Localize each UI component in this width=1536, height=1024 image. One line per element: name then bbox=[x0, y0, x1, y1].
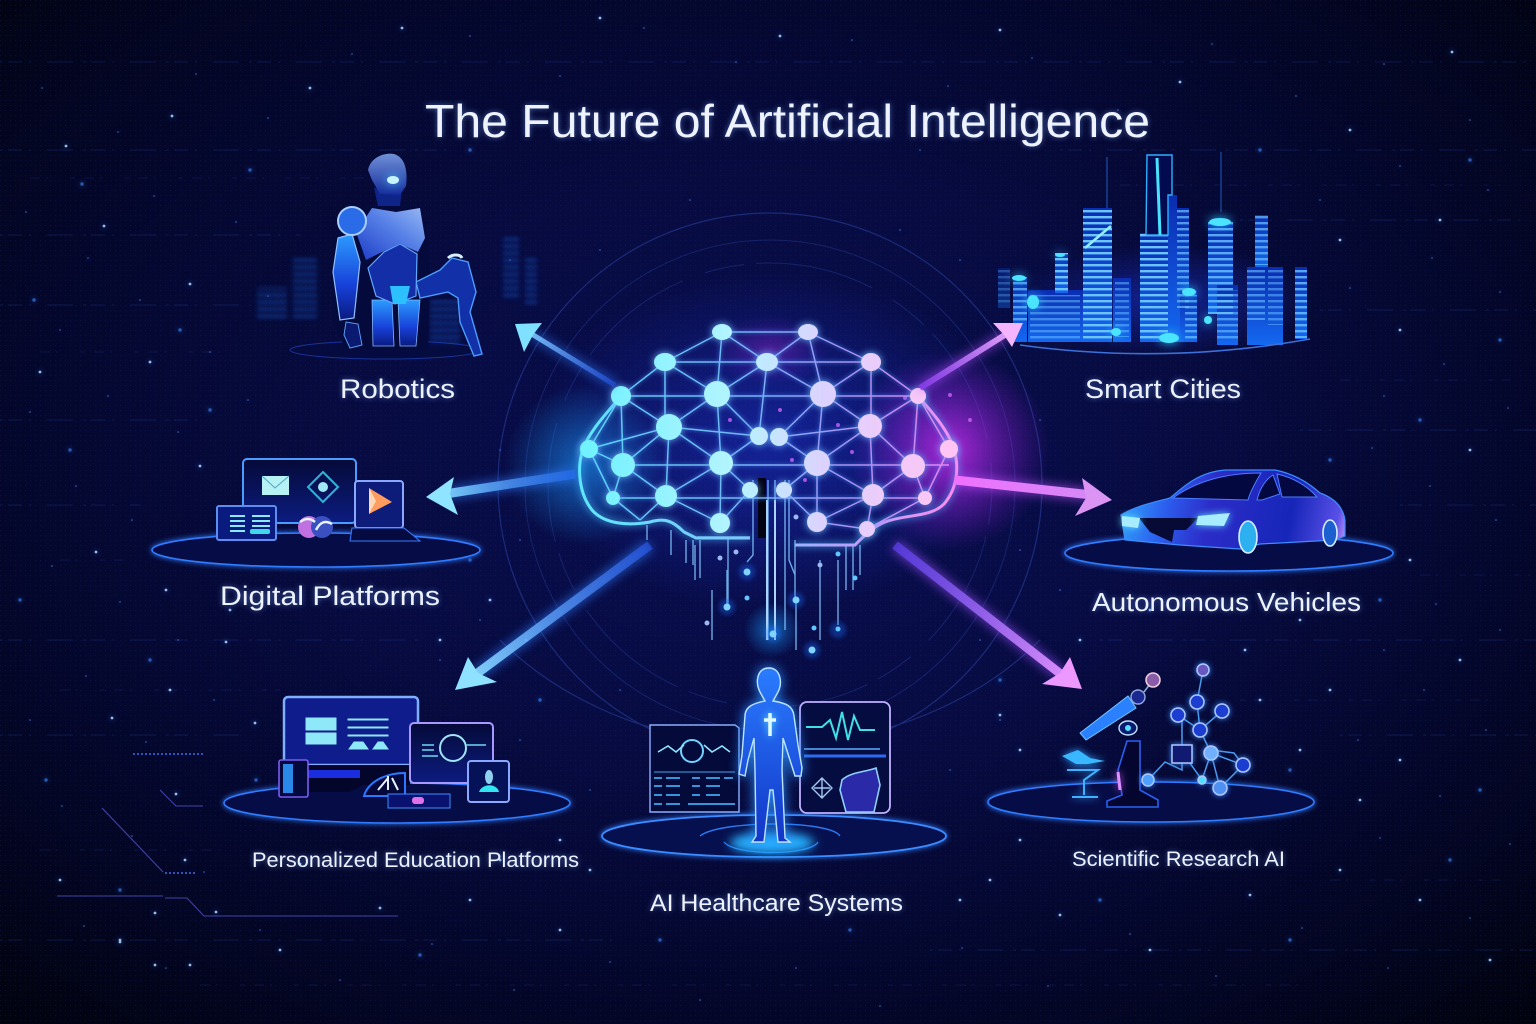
arrow: to smart cities bbox=[920, 323, 1023, 388]
building bases bbox=[998, 195, 1307, 345]
robot hand bbox=[344, 322, 362, 348]
platform ellipse bbox=[152, 533, 480, 567]
dim skyline bbox=[257, 238, 537, 348]
tower bbox=[279, 760, 308, 797]
autonomous vehicle illustration bbox=[1065, 470, 1393, 571]
inner rings bbox=[700, 824, 840, 852]
car wheels bbox=[1239, 520, 1337, 553]
smart cities label: Smart Cities bbox=[1085, 374, 1241, 404]
robot side arm bbox=[416, 258, 482, 356]
left panel bbox=[650, 725, 739, 812]
circuit dots bbox=[707, 395, 970, 650]
monitor content bbox=[306, 718, 388, 749]
profile tablet bbox=[468, 761, 509, 802]
base glow bbox=[730, 832, 814, 854]
lit windows bbox=[998, 208, 1307, 342]
robot eye bbox=[387, 176, 399, 184]
tablet with play icon bbox=[350, 481, 420, 541]
platform ellipse bbox=[602, 815, 946, 857]
robot abdomen bbox=[368, 244, 417, 304]
title: The Future of Artificial Intelligence bbox=[425, 95, 1150, 147]
car body bbox=[1121, 470, 1345, 549]
bright accents bbox=[1012, 218, 1231, 343]
arrow: to autonomous vehicles bbox=[955, 478, 1112, 516]
platform ellipse bbox=[988, 782, 1314, 822]
hud rings behind the brain bbox=[498, 213, 1042, 757]
arrow: to scientific research ai bbox=[895, 545, 1082, 689]
robotics label: Robotics bbox=[340, 374, 455, 404]
keyboard accent bbox=[388, 794, 450, 808]
robot shoulder bbox=[338, 207, 366, 235]
flask glass shapes bbox=[1062, 750, 1105, 797]
robot neck bbox=[374, 188, 402, 206]
network edges bbox=[589, 332, 949, 529]
digital platforms illustration bbox=[152, 459, 480, 567]
dial icon bbox=[308, 472, 338, 502]
brain network bbox=[580, 324, 958, 545]
circuit traces below the brain bbox=[647, 478, 860, 650]
human figure bbox=[739, 668, 802, 842]
brain outline bbox=[580, 396, 957, 545]
arrow: to robotics bbox=[515, 323, 615, 385]
personalized education label: Personalized Education Platforms bbox=[252, 849, 579, 872]
robot arm left bbox=[333, 234, 360, 320]
robot head bbox=[368, 154, 406, 195]
envelope icon bbox=[262, 476, 289, 495]
car headlight bbox=[1122, 513, 1230, 528]
heart glow bbox=[764, 713, 776, 736]
healthcare label: AI Healthcare Systems bbox=[650, 890, 903, 917]
digital platforms label: Digital Platforms bbox=[220, 581, 440, 611]
mouse bbox=[364, 773, 405, 796]
dim antenna lines bbox=[1107, 152, 1221, 212]
arrow: to personalized education platforms bbox=[455, 545, 650, 690]
platform ellipse bbox=[224, 783, 570, 823]
robot legs bbox=[372, 300, 420, 346]
main monitor bbox=[284, 697, 418, 765]
robotics illustration bbox=[257, 154, 537, 359]
arrow: to digital platforms bbox=[426, 474, 575, 515]
network nodes bbox=[580, 324, 958, 537]
healthcare illustration bbox=[602, 668, 946, 857]
main monitor bbox=[243, 459, 356, 523]
scientific research label: Scientific Research AI bbox=[1072, 848, 1285, 871]
autonomous vehicles label: Autonomous Vehicles bbox=[1092, 587, 1361, 617]
monitor stand bbox=[308, 765, 410, 792]
car grille bbox=[1139, 518, 1198, 542]
car windows bbox=[1173, 473, 1317, 500]
right panel bbox=[800, 702, 890, 813]
central glow bbox=[505, 270, 1050, 658]
research illustration bbox=[988, 664, 1314, 822]
education illustration bbox=[224, 697, 570, 823]
smart city illustration bbox=[998, 152, 1315, 355]
microscope bbox=[1080, 673, 1160, 807]
tower top bbox=[1146, 155, 1172, 235]
molecule bbox=[1142, 664, 1250, 795]
side panel bbox=[217, 506, 276, 540]
second screen bbox=[410, 723, 493, 783]
robot dark backing bbox=[332, 206, 430, 350]
brain sphere bbox=[298, 516, 333, 538]
platform ellipse bbox=[1065, 535, 1393, 571]
robot chest bbox=[356, 208, 425, 260]
